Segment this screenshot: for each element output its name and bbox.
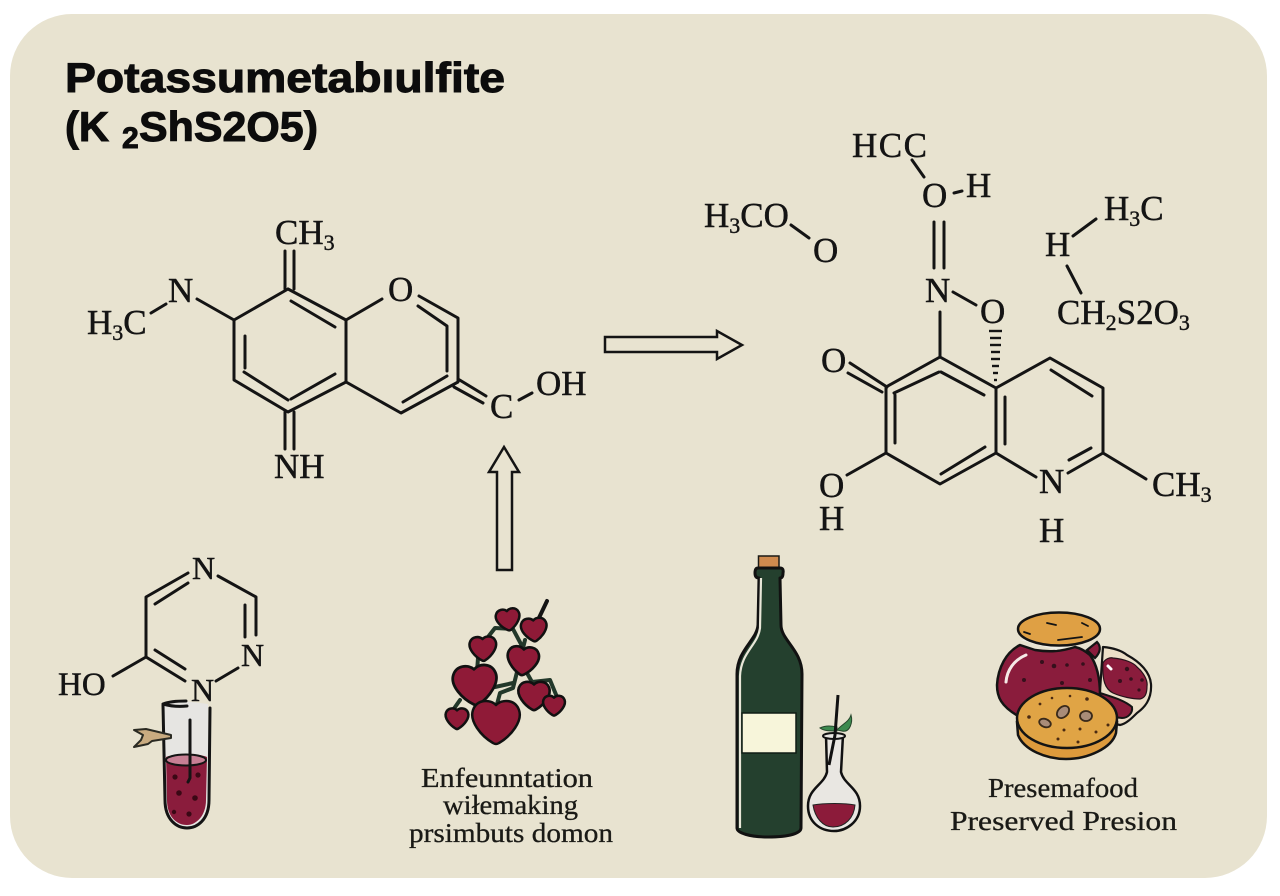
- molecule: left chromene structure: [87, 213, 587, 486]
- molecule: right quinoline structure: 3: [729, 213, 740, 238]
- icon: small carafe: [808, 695, 860, 831]
- molecule: right quinoline structure: [704, 126, 1212, 550]
- label: fermentation: Enfeunntation: [421, 763, 594, 793]
- molecule: right quinoline structure: O: [922, 176, 947, 215]
- molecule: right quinoline structure: H: [1104, 189, 1129, 228]
- molecule: right quinoline structure: 2: [1106, 310, 1117, 335]
- molecule: right quinoline structure: 3: [1201, 482, 1212, 507]
- label: preserved food: Preserved Presion: [950, 806, 1178, 836]
- label: fermentation: prsimbuts domon: [409, 818, 614, 848]
- molecule: left chromene structure: 3: [324, 230, 335, 255]
- molecule: right quinoline structure: CH: [1057, 293, 1106, 332]
- title: 2: [122, 122, 139, 155]
- fig slice: [1098, 647, 1151, 725]
- molecule: right quinoline structure: CO: [740, 196, 789, 235]
- molecule: right quinoline structure: 3: [1179, 310, 1190, 335]
- molecule: right quinoline structure: N: [1039, 462, 1064, 501]
- molecule: left chromene structure: 3: [112, 320, 123, 345]
- stereo hash bond: [989, 331, 1002, 380]
- label: fermentation: [409, 763, 614, 848]
- molecule: left chromene structure: H: [87, 303, 112, 342]
- molecule: right quinoline structure: H: [704, 196, 729, 235]
- lid: [1018, 612, 1100, 646]
- molecule: right quinoline structure: O: [819, 466, 844, 505]
- molecule: right quinoline structure: HCC: [852, 126, 927, 165]
- icon: wine bottle: [737, 556, 860, 837]
- molecule: left chromene structure: C: [123, 303, 147, 342]
- label: preserved food: Presemafood: [988, 773, 1139, 803]
- molecule: triazine ring: N: [241, 637, 264, 673]
- molecule: right quinoline structure: C: [1140, 189, 1164, 228]
- molecule: right quinoline structure: 3: [1129, 206, 1140, 231]
- icon: test tube with wine: [134, 701, 210, 828]
- molecule: left chromene structure: CH: [275, 213, 324, 252]
- molecule: right quinoline structure: O: [813, 231, 838, 270]
- molecule: right quinoline structure: O: [821, 341, 846, 380]
- molecule: triazine ring: N: [191, 672, 214, 708]
- molecule: left chromene structure: NH: [274, 447, 325, 486]
- molecule: left chromene structure: OH: [536, 364, 587, 403]
- label: preserved food: [950, 773, 1178, 836]
- molecule: right quinoline structure: H: [819, 499, 844, 538]
- molecule: right quinoline structure: S2O: [1117, 293, 1179, 332]
- title: (K: [65, 103, 109, 150]
- molecule: right quinoline structure: CH: [1152, 465, 1201, 504]
- biscuit: [1017, 722, 1117, 759]
- label: fermentation: wiłemaking: [443, 790, 578, 820]
- molecule: triazine ring: HO: [58, 667, 106, 703]
- molecule: triazine ring: N: [192, 550, 215, 586]
- arrow: reaction right: [605, 331, 742, 359]
- molecule: right quinoline structure: N: [925, 271, 950, 310]
- title: [65, 54, 505, 155]
- icon: preserved jam and biscuit: [997, 612, 1151, 759]
- molecule: left chromene structure: C: [490, 387, 513, 426]
- molecule: right quinoline structure: O: [980, 292, 1005, 331]
- icon: pointer tab: [134, 729, 171, 747]
- molecule: triazine ring: [58, 550, 264, 708]
- icon: cherries / grape cluster: [446, 601, 565, 744]
- arrow: upward from fermentation: [489, 447, 519, 570]
- title: Potassumetabıulfite: [65, 54, 505, 101]
- jam jar: [997, 645, 1100, 716]
- molecule: right quinoline structure: H: [966, 166, 991, 205]
- title: ShS2O5): [139, 103, 318, 150]
- molecule: right quinoline structure: H: [1045, 225, 1070, 264]
- molecule: left chromene structure: O: [388, 270, 413, 309]
- molecule: right quinoline structure: H: [1039, 511, 1064, 550]
- molecule: left chromene structure: N: [168, 271, 193, 310]
